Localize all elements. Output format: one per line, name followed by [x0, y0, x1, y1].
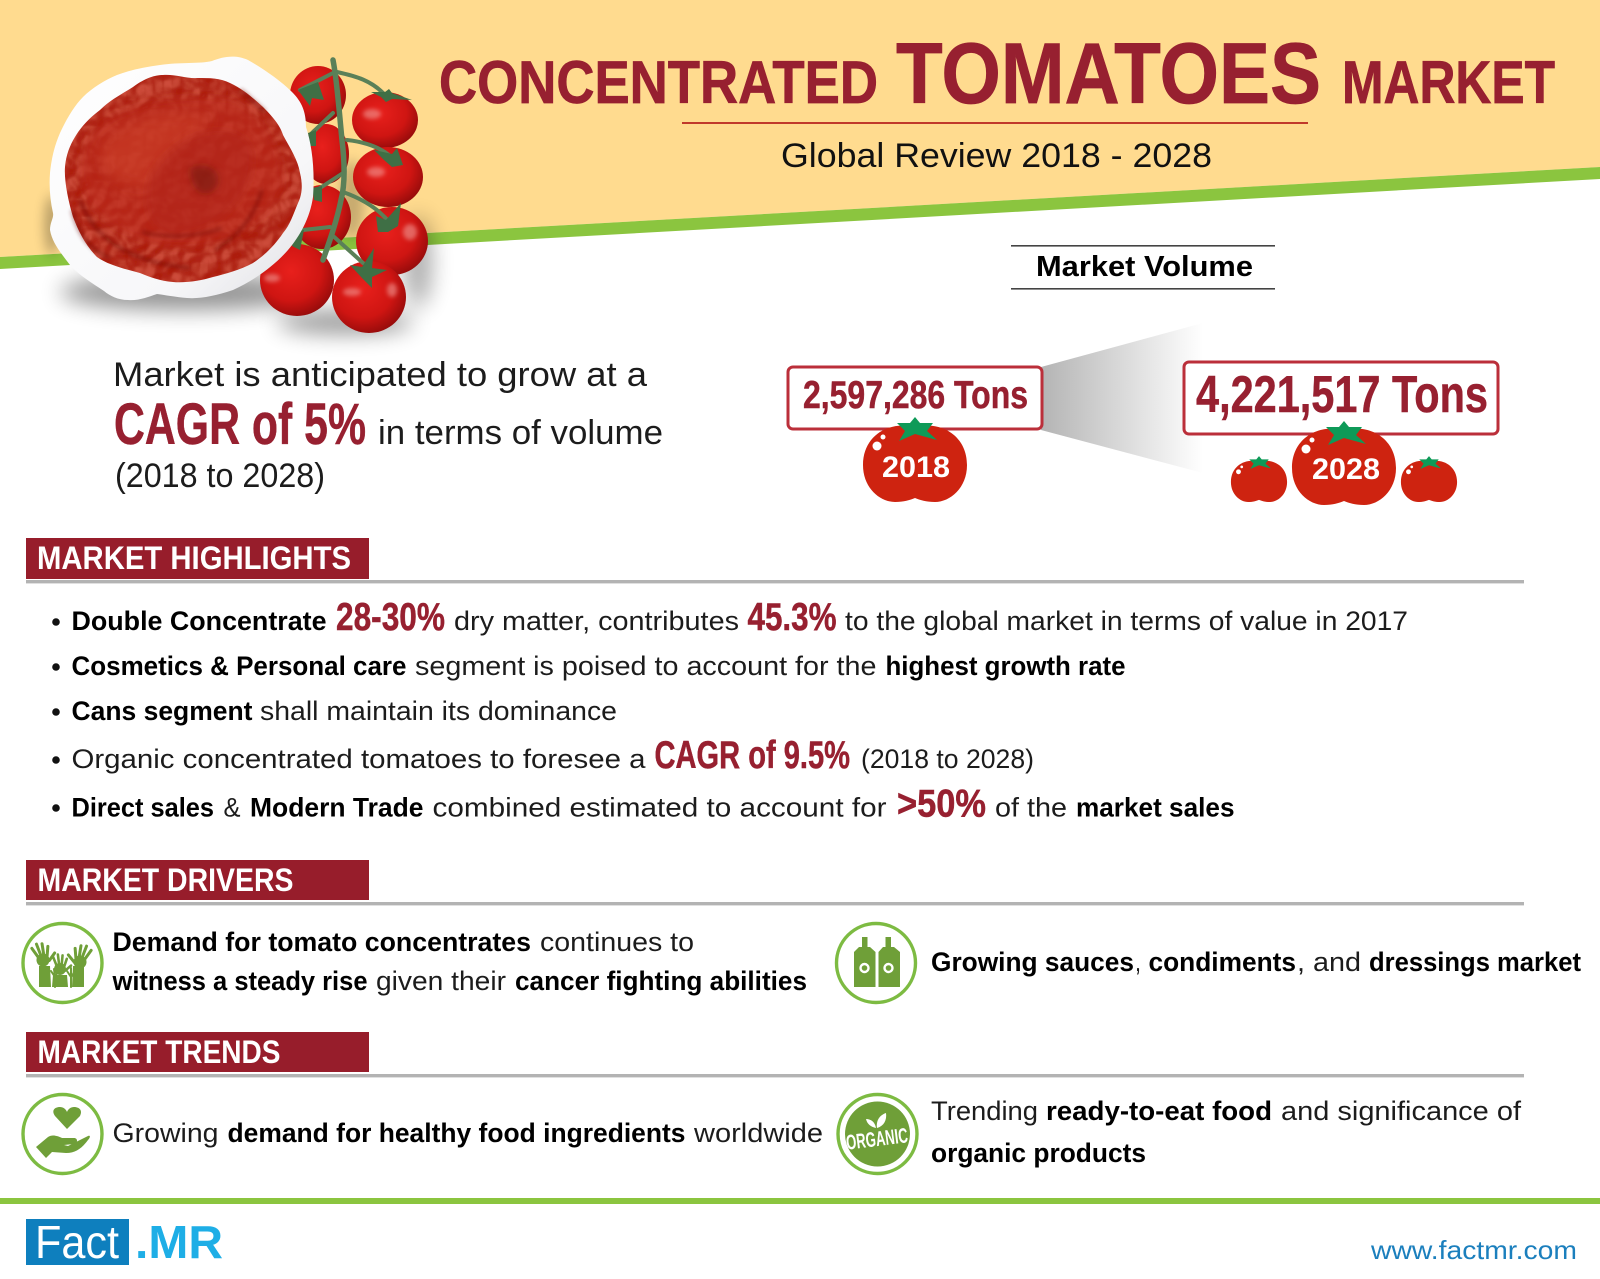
- driver text 2: ,: [1135, 947, 1141, 977]
- trend text 1: Growing: [112, 1118, 218, 1148]
- tomato highlights: [264, 109, 417, 297]
- highlight 4: CAGR of 9.5%: [654, 734, 850, 777]
- driver text 2: [931, 947, 1581, 977]
- highlight 2: [52, 651, 1126, 681]
- panel: market drivers: [23, 860, 1581, 1002]
- logo: Fact.MR: .MR: [135, 1216, 223, 1268]
- title: TOMATOES: [896, 26, 1321, 122]
- highlight 3: Cans segment: [72, 696, 253, 726]
- 2028 volume box: [1184, 362, 1498, 434]
- growth wedge: [1041, 323, 1203, 473]
- heading: market highlights: [26, 538, 1524, 583]
- photo: bowl of tomato paste with cherry tomatoes: [45, 57, 432, 334]
- header banner background: [0, 0, 1600, 257]
- highlight 1: [52, 596, 1408, 639]
- title: CONCENTRATED: [439, 49, 878, 116]
- highlight 2: highest growth rate: [886, 651, 1126, 681]
- driver text 2: Growing sauces: [931, 947, 1134, 977]
- heading: market trends: MARKET TRENDS: [38, 1034, 280, 1070]
- driver text 2: , and: [1297, 947, 1361, 977]
- driver text 2: dressings market: [1369, 947, 1581, 977]
- highlight 4: (2018 to 2028): [861, 744, 1034, 774]
- trend text 2: Trending: [931, 1096, 1038, 1126]
- trend text 1: worldwide: [693, 1118, 823, 1148]
- driver text 1: cancer fighting abilities: [515, 966, 807, 996]
- icon: organic badge: [838, 1094, 917, 1174]
- 2018 volume box: 2,597,286 Tons: [803, 374, 1028, 417]
- highlight 5: >50%: [897, 782, 986, 826]
- logo: Fact.MR: [26, 1216, 223, 1268]
- heading: market drivers: [26, 860, 1524, 905]
- icon: small tomato right: [1401, 456, 1457, 502]
- panel: market trends: [23, 1032, 1524, 1174]
- logo: Fact.MR: Fact: [35, 1216, 119, 1268]
- highlight 1: 28-30%: [336, 596, 445, 639]
- icon: 2018 tomato: 2018: [882, 451, 950, 484]
- title: MARKET: [1342, 49, 1555, 116]
- trend text 2: organic products: [931, 1138, 1146, 1168]
- soft shadows: [45, 160, 432, 334]
- driver text 2: condiments: [1148, 947, 1296, 977]
- highlight 3: [52, 696, 617, 726]
- calyxes: [292, 82, 412, 288]
- subtitle: Global Review 2018 - 2028: [781, 137, 1212, 175]
- highlight 5: Modern Trade: [250, 792, 424, 822]
- market volume heading: Market Volume: [1036, 251, 1253, 283]
- trend text 1: demand for healthy food ingredients: [228, 1118, 686, 1148]
- highlight 2: Cosmetics & Personal care: [72, 651, 406, 681]
- tomato paste: [65, 75, 302, 282]
- panel: market highlights: [26, 538, 1524, 826]
- CAGR statement: CAGR of 5%: [114, 392, 366, 457]
- highlight 4: [52, 734, 1034, 777]
- website url: www.factmr.com: [1370, 1235, 1577, 1265]
- highlight 1: dry matter, contributes: [454, 606, 739, 636]
- heading: market trends: [26, 1032, 1524, 1077]
- icon: raised hands: [23, 924, 102, 1002]
- highlight 5: combined estimated to account for: [432, 792, 886, 822]
- highlight 1: Double Concentrate: [72, 606, 326, 636]
- white bowl: [50, 57, 314, 300]
- highlight 4: Organic concentrated tomatoes to foresee a: [72, 744, 647, 774]
- highlight 2: segment is poised to account for the: [415, 651, 876, 681]
- cherry tomatoes: [260, 66, 428, 333]
- highlight 3: shall maintain its dominance: [260, 696, 617, 726]
- icon: organic badge: ORGANIC: [845, 1124, 909, 1155]
- icon: 2028 tomato: 2028: [1312, 453, 1380, 486]
- heading: market highlights: MARKET HIGHLIGHTS: [37, 540, 351, 576]
- CAGR statement: in terms of volume: [378, 414, 663, 452]
- trend text 2: ready-to-eat food: [1046, 1096, 1272, 1126]
- CAGR statement: [113, 356, 663, 495]
- trend text 2: and significance of: [1281, 1096, 1522, 1126]
- trend text 2: [931, 1096, 1522, 1168]
- CAGR statement: (2018 to 2028): [115, 457, 325, 495]
- CAGR statement: Market is anticipated to grow at a: [113, 356, 647, 394]
- highlight 1: to the global market in terms of value in 2017: [845, 606, 1408, 636]
- driver text 1: witness a steady rise: [112, 966, 368, 996]
- trend text 1: [112, 1118, 823, 1148]
- heading: market drivers: MARKET DRIVERS: [38, 862, 294, 898]
- highlight 5: of the: [995, 792, 1067, 822]
- driver text 1: continues to: [540, 927, 694, 957]
- title underline: [682, 122, 1308, 124]
- highlight 5: &: [224, 792, 240, 822]
- 2028 volume box: 4,221,517 Tons: [1196, 366, 1488, 424]
- vine: [300, 60, 397, 263]
- highlight 1: 45.3%: [748, 596, 836, 639]
- icon: heart in hand: [23, 1094, 102, 1174]
- icon: 2028 tomato: [1292, 421, 1396, 505]
- highlight 5: [52, 782, 1235, 826]
- highlight 5: Direct sales: [72, 792, 214, 822]
- 2018 volume box: [788, 367, 1042, 429]
- highlight 5: market sales: [1076, 792, 1234, 822]
- title: [439, 26, 1555, 122]
- icon: 2018 tomato: [863, 417, 967, 502]
- icon: small tomato left: [1231, 456, 1287, 502]
- footer rule: [0, 1198, 1600, 1204]
- icon: sauce bottles: [836, 924, 916, 1002]
- driver text 1: given their: [376, 966, 506, 996]
- driver text 1: [112, 927, 807, 996]
- green diagonal stripe: [0, 167, 1600, 269]
- driver text 1: Demand for tomato concentrates: [112, 927, 531, 957]
